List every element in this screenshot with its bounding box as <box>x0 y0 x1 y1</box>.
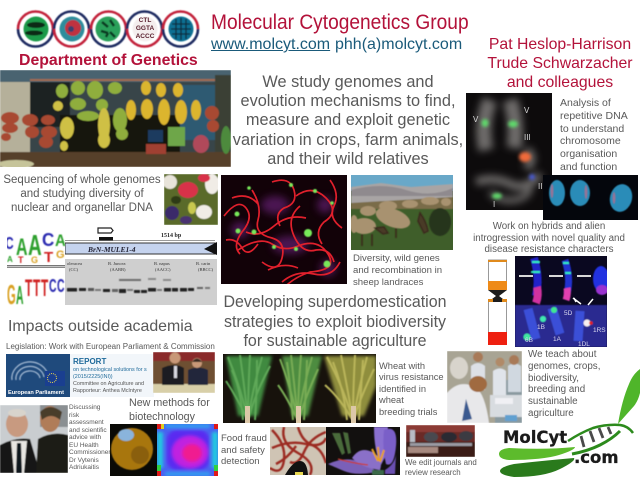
caption: repetitive DNA: to understand <box>560 123 624 135</box>
caption: teaching <box>528 349 600 419</box>
caption: food fraud: detection <box>221 456 260 467</box>
caption: risk assessment advice: Adriukaitis <box>69 464 99 471</box>
photo: flowers <box>164 174 218 225</box>
email address: phh(a)molcyt.com <box>335 36 462 53</box>
caption: food fraud: and safety <box>221 445 265 456</box>
chart: sequence logos: A <box>28 230 42 262</box>
micrograph: hybrid chromosomes FISH: 1RS <box>593 327 606 334</box>
logo: five circular emblems: GGTA <box>136 25 154 32</box>
micrograph: hybrid chromosomes FISH: 1A <box>553 336 562 343</box>
logo: MolCyt.com DNA: .com <box>574 448 619 467</box>
diagram: chromosome ideogram <box>488 260 507 345</box>
heading: superdomestication: for sustainable agriculture <box>243 331 426 350</box>
caption: sheep: sheep landraces <box>353 277 423 288</box>
caption: teaching: sustainable <box>528 396 578 407</box>
gene bar <box>65 242 217 255</box>
caption: teaching: biodiversity, <box>528 373 579 384</box>
panel: report excerpt <box>70 354 154 397</box>
heading: new methods <box>129 397 210 422</box>
gel image: (CC) <box>69 267 79 272</box>
caption: wheat: breeding trials <box>379 407 437 417</box>
gel image <box>65 259 217 305</box>
logo: MolCyt.com DNA: MolCyt <box>503 428 567 447</box>
photo: teaching in the laboratory <box>447 351 522 423</box>
micrograph: labelled chromosomes: V <box>524 106 530 115</box>
gel image: B. napus <box>154 261 170 266</box>
caption: sheep <box>353 253 442 288</box>
micrograph: hybrid chromosomes FISH: 5D <box>564 310 573 317</box>
chart: gene map and gel: 1514 bp <box>161 233 182 239</box>
caption: journals <box>405 458 477 476</box>
micrograph: labelled chromosomes: I <box>493 200 495 209</box>
photo: meeting at parliament <box>153 352 215 393</box>
photo: microscope cell <box>110 424 157 476</box>
micrograph: labelled chromosomes: II <box>538 182 542 191</box>
caption: risk assessment advice <box>69 404 111 471</box>
caption: sequencing: nuclear and organellar DNA <box>11 202 153 214</box>
caption: teaching: genomes, crops, <box>528 361 600 372</box>
gel image: (AACC) <box>155 267 171 272</box>
panel: report excerpt: (2015/2225(INI)) <box>73 374 113 380</box>
caption: food fraud <box>221 433 267 467</box>
logo: five circular emblems <box>16 9 200 49</box>
main statement: and their wild relatives <box>267 149 429 168</box>
photo: wheat trial plots <box>223 354 376 423</box>
photo: saffron crocus <box>326 427 400 475</box>
micrograph: labelled chromosomes: III <box>524 133 531 142</box>
heading: superdomestication <box>224 292 446 350</box>
caption: teaching: breeding and <box>528 384 585 395</box>
authors: and colleagues <box>507 74 613 91</box>
micrograph: red saffron fibres <box>270 427 326 475</box>
caption: sequencing <box>3 174 161 214</box>
caption: risk assessment advice: EU Health <box>69 442 99 448</box>
caption: repetitive DNA: organisation <box>560 148 617 160</box>
caption: wheat: Wheat with <box>379 361 425 371</box>
caption: sequencing: Sequencing of whole genomes <box>3 174 161 186</box>
caption: food fraud: Food fraud <box>221 433 267 444</box>
gel image: B. carin <box>196 261 211 266</box>
heading: superdomestication: Developing superdomestication <box>224 292 446 311</box>
chart: sequence logos: T <box>18 255 24 265</box>
caption: repetitive DNA <box>560 97 628 173</box>
gel image: oleracea <box>67 261 82 266</box>
caption: risk assessment advice: risk <box>69 412 79 418</box>
logo: five circular emblems: CTL <box>139 17 151 24</box>
heading: superdomestication: strategies to exploit biodiversity <box>224 312 446 330</box>
logo: MolCyt.com DNA <box>499 369 640 477</box>
main statement <box>232 72 463 168</box>
caption: teaching: We teach about <box>528 349 596 360</box>
caption: repetitive DNA: chromosome <box>560 135 621 147</box>
heading: new methods: biotechnology <box>129 410 195 422</box>
caption: risk assessment advice: assessment <box>69 419 104 426</box>
caption: sheep: and recombination in <box>353 265 442 276</box>
micrograph: labelled chromosomes <box>466 93 552 210</box>
chart: sequence logos: G <box>31 255 38 265</box>
caption: hybrids: introgression with novel quality and <box>473 232 625 244</box>
photo: banana market stall <box>0 70 231 167</box>
title: Molecular Cytogenetics Group <box>211 11 469 34</box>
chart: sequence logos: G <box>56 249 65 261</box>
photo: meeting with EU commissioner <box>0 405 68 473</box>
logo: five circular emblems: ACCC <box>136 33 155 40</box>
main statement: We study genomes and <box>262 72 434 91</box>
chart: sequence logos: C <box>49 277 57 297</box>
caption: wheat: identified in <box>379 384 426 394</box>
caption: sheep: Diversity, wild genes <box>353 253 440 264</box>
chart: heat map <box>157 424 218 476</box>
caption: risk assessment advice: Discussing <box>69 404 100 411</box>
caption: risk assessment advice: and scientific <box>69 426 107 434</box>
chart: sequence logos: A <box>7 255 13 264</box>
caption: journals: review research <box>405 468 461 476</box>
website link: www.molcyt.com <box>211 36 330 53</box>
micrograph: blue nuclei <box>543 175 638 220</box>
caption: repetitive DNA: repetitive DNA <box>560 110 628 122</box>
gel image: B. Juncea <box>108 261 126 266</box>
chart: sequence logos: T <box>41 274 49 301</box>
micrograph: hybrid chromosomes FISH <box>515 256 607 347</box>
panel: European Parliament logo <box>6 354 70 397</box>
chart: sequence logos: T <box>25 274 33 301</box>
caption: repetitive DNA: and function <box>560 161 617 173</box>
caption: repetitive DNA: Analysis of <box>560 97 611 109</box>
gel image: (AABB) <box>110 267 126 272</box>
heading: impacts: Impacts outside academia <box>8 318 193 335</box>
caption: risk assessment advice: Dr Vytenis <box>69 456 99 464</box>
chart: sequence logos: C <box>57 277 65 297</box>
micrograph: hybrid chromosomes FISH: 1B <box>537 324 545 331</box>
chart: sequence logos: T <box>44 249 53 266</box>
chart: gene map and gel <box>65 227 217 305</box>
caption: sequencing: and studying diversity of <box>20 188 144 200</box>
photo: editorial meeting <box>406 425 475 457</box>
caption: journals: We edit journals and <box>405 458 477 467</box>
micrograph: hybrid chromosomes FISH: 6B <box>525 337 533 344</box>
gel image: (BBCC) <box>198 267 214 272</box>
caption: teaching: agriculture <box>528 408 574 419</box>
caption: wheat: virus resistance <box>379 372 444 382</box>
main statement: measure and exploit genetic <box>246 110 450 129</box>
main statement: evolution mechanisms to find, <box>240 91 455 110</box>
panel: report excerpt: REPORT <box>73 357 106 366</box>
caption: hybrids <box>473 221 625 255</box>
panel: European Parliament logo: European Parliament <box>8 390 64 396</box>
caption: risk assessment advice: advice with <box>69 434 101 441</box>
micrograph: red chromosomes <box>221 175 347 284</box>
caption: hybrids: Work on hybrids and alien <box>493 221 605 232</box>
heading: new methods: New methods for <box>129 397 210 409</box>
photo: sheep landraces <box>351 175 453 250</box>
panel: report excerpt: on technological solutions for s <box>73 367 147 373</box>
main statement: variation in crops, farm animals, <box>233 130 463 149</box>
caption: hybrids: disease resistance characters <box>484 244 613 255</box>
heading: department: Department of Genetics <box>19 52 198 69</box>
panel: report excerpt: Committee on Agriculture and <box>73 381 144 387</box>
chart: sequence logos: A <box>16 235 28 261</box>
caption: wheat <box>379 361 444 417</box>
authors <box>487 36 633 91</box>
caption: legislation: Legislation: Work with European Parliament & Commission <box>6 342 215 351</box>
authors: Pat Heslop-Harrison <box>489 36 631 53</box>
authors: Trude Schwarzacher <box>487 55 633 72</box>
micrograph: labelled chromosomes: V <box>473 115 479 124</box>
gene bar: BrN-MULE1-4 <box>87 245 136 254</box>
caption: wheat: wheat <box>379 395 404 405</box>
chart: sequence logos: T <box>33 274 41 301</box>
chart: sequence logos <box>7 230 65 307</box>
panel: report excerpt: Rapporteur: Anthea McIntyre <box>73 388 142 394</box>
caption: risk assessment advice: Commissioner <box>69 449 111 456</box>
